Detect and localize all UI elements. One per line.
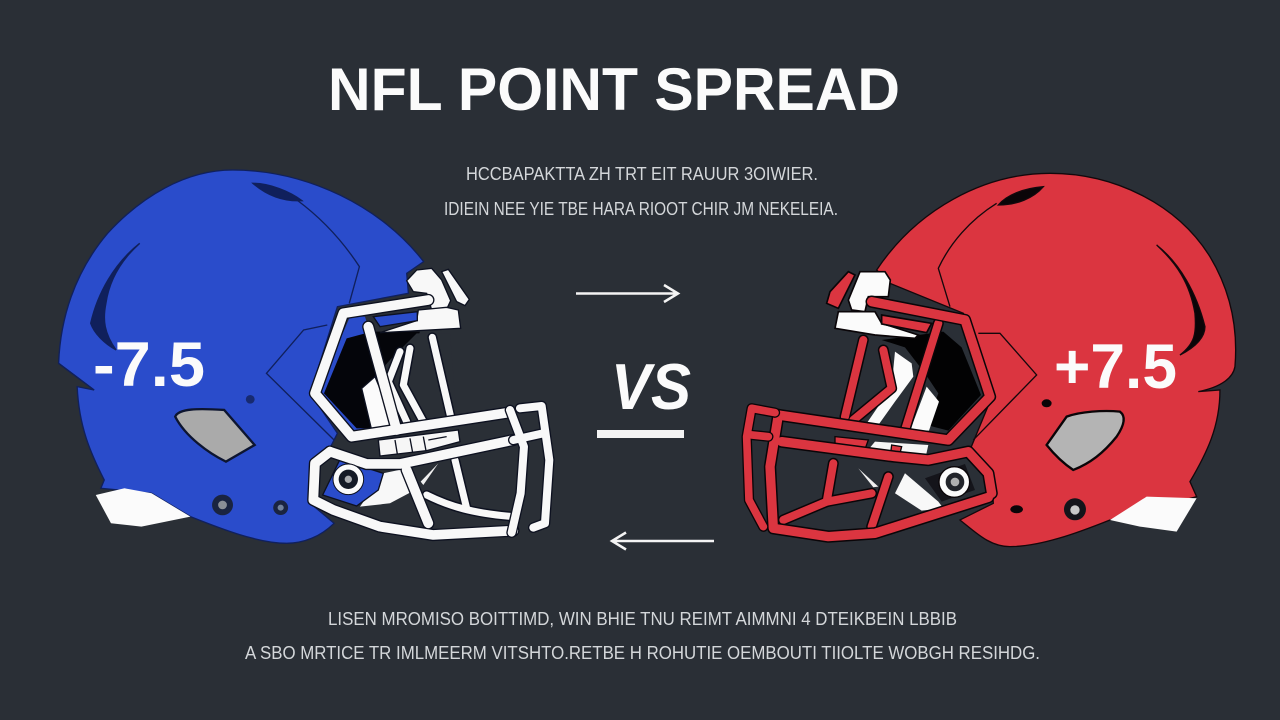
- blue helmet: [59, 170, 549, 543]
- spread value: favorite: -7.5: [93, 330, 205, 400]
- blue helmet facemask: [313, 268, 549, 535]
- blue facemask clip: [373, 268, 469, 333]
- red facemask snap: [939, 467, 970, 497]
- intro text block: IDIEIN NEE YIE TBE HARA RIOOT CHIR JM NEKELEIA.: [444, 199, 838, 219]
- arrow: pointing right: [576, 285, 678, 302]
- intro text block: HCCBAPAKTTA ZH TRT EIT RAUUR 3OIWIER.: [466, 164, 818, 184]
- arrow: pointing left: [612, 532, 714, 550]
- footer text block: [245, 609, 1040, 663]
- red facemask clip: [827, 272, 932, 338]
- vs label: VS: [611, 350, 691, 423]
- red facemask tubes: [783, 323, 938, 527]
- blue facemask tubes: [313, 300, 513, 535]
- vs underline: [597, 430, 684, 438]
- footer text block: LISEN MROMISO BOITTIMD, WIN BHIE TNU REIMT AIMMNI 4 DTEIKBEIN LBBIB: [328, 609, 957, 629]
- red helmet facemask: [747, 272, 992, 537]
- footer text block: A SBO MRTICE TR IMLMEERM VITSHTO.RETBE H ROHUTIE OEMBOUTI TIIOLTE WOBGH RESIHDG.: [245, 643, 1040, 663]
- intro text block: [444, 164, 838, 219]
- blue facemask snap: [333, 464, 364, 495]
- title: NFL POINT SPREAD: [328, 56, 900, 123]
- red helmet shell: [877, 173, 1236, 547]
- spread value: underdog: +7.5: [1054, 332, 1177, 402]
- blue helmet shell: [59, 170, 424, 543]
- red helmet: [747, 173, 1236, 547]
